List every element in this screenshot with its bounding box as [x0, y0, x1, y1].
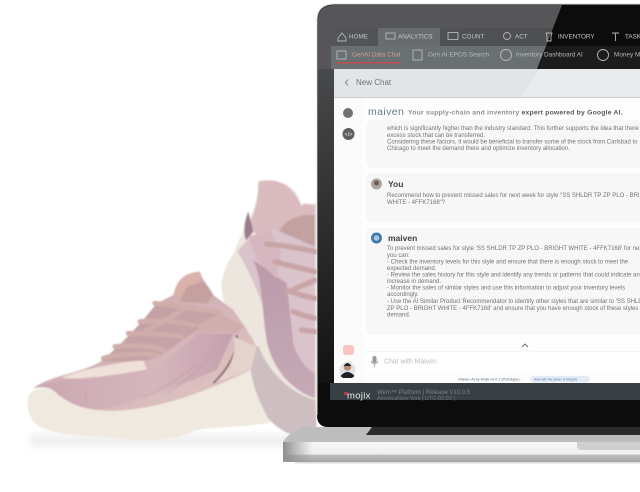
message card: maiven: - Monitor the sales of similar styles and use this information to adjust your inventory levels — [387, 286, 625, 292]
icon: chat — [343, 108, 353, 118]
message card: maiven: you can: — [387, 253, 410, 259]
chat input: Chat with Maiven — [384, 358, 437, 366]
message card: previous reply — [387, 126, 638, 152]
sub tabs: GenAI Data Chat — [352, 52, 401, 58]
top tabs: HOME — [349, 34, 368, 40]
version note — [458, 376, 590, 382]
badge — [343, 345, 354, 355]
active underline — [336, 62, 400, 64]
sneaker: rear shoe standing upright — [221, 180, 317, 436]
brand banner — [368, 108, 622, 116]
sidebar — [340, 108, 356, 378]
message card: maiven: demand. — [387, 312, 411, 318]
ground shadow — [30, 430, 290, 454]
laptop base — [283, 427, 640, 464]
laptop bezel — [317, 4, 640, 427]
message card: you — [371, 178, 640, 204]
message card: previous reply: which is significantly higher than the industry standard. This further supports the idea that there is — [386, 126, 640, 132]
illustration: pink sneakers — [28, 180, 317, 440]
avatar: maiven — [371, 232, 382, 244]
footer bar: Wem™ Platform | Release V10.0.5 — [377, 389, 471, 396]
message card: maiven: increase in demand. — [387, 279, 441, 285]
avatar — [340, 362, 356, 378]
message card: you: WHITE - 4FFK7168"? — [387, 200, 446, 206]
message card: maiven: accordingly. — [387, 292, 419, 298]
message card: maiven: maiven — [388, 233, 417, 243]
footer bar — [330, 383, 640, 402]
active tab: analytics — [378, 28, 440, 46]
message card: maiven: expected demand. — [387, 266, 437, 272]
footer bar: mojix — [347, 390, 371, 402]
chat input — [368, 351, 640, 367]
message card: maiven: - Check the inventory levels for this style and ensure that there is enough stock to meet the — [387, 260, 629, 266]
top tabs — [350, 34, 640, 38]
message card: previous reply: excess stock that can be transferred. — [387, 133, 485, 139]
laptop — [283, 4, 640, 464]
message card: maiven — [371, 232, 640, 316]
top tabs: ANALYTICS — [398, 34, 433, 40]
icon: collapse chevron — [522, 344, 528, 347]
screen glare on bezel — [318, 5, 562, 69]
brand banner: Your supply-chain and inventory expert powered by Google AI. — [408, 110, 623, 116]
brand banner: maiven — [368, 106, 404, 118]
sub tabs: Gen AI EPOS Search — [428, 52, 490, 58]
navigation bar — [331, 28, 640, 69]
sub tabs — [352, 52, 640, 58]
top tabs: INVENTORY — [558, 34, 595, 40]
top tabs: ACT — [515, 34, 528, 40]
top tabs: COUNT — [462, 34, 485, 40]
sneaker: front shoe — [28, 272, 271, 440]
nav icons top — [338, 32, 619, 41]
header: new chat — [334, 69, 640, 98]
version note: Now with the power of Insights — [534, 378, 578, 382]
icon: code: </> — [345, 132, 352, 138]
nav icons sub — [337, 50, 608, 60]
avatar: you — [371, 178, 382, 190]
message card: previous reply: Considering these factors, it would be beneficial to transfer some of the stock from Carlsbad to — [387, 140, 638, 146]
sub tabs: Money M — [614, 52, 640, 58]
message card: previous reply: Chicago to meet the demand there and optimize inventory allocation. — [387, 146, 570, 152]
version note: Maiven AI by Mojix v0.0.1 (Prototype) - — [458, 378, 523, 382]
footer bar: AmericaNew York | UTC-05:00 | — [377, 396, 455, 402]
message card: maiven: - Review the sales history for this style and identify any trends or patterns that could indicate an — [387, 272, 640, 278]
header: new chat: New Chat — [356, 78, 392, 87]
icon: code — [342, 128, 354, 140]
sub tabs: Inventory Dashboard AI — [516, 52, 583, 58]
app screen — [334, 69, 640, 383]
message card: you: You — [388, 179, 403, 189]
